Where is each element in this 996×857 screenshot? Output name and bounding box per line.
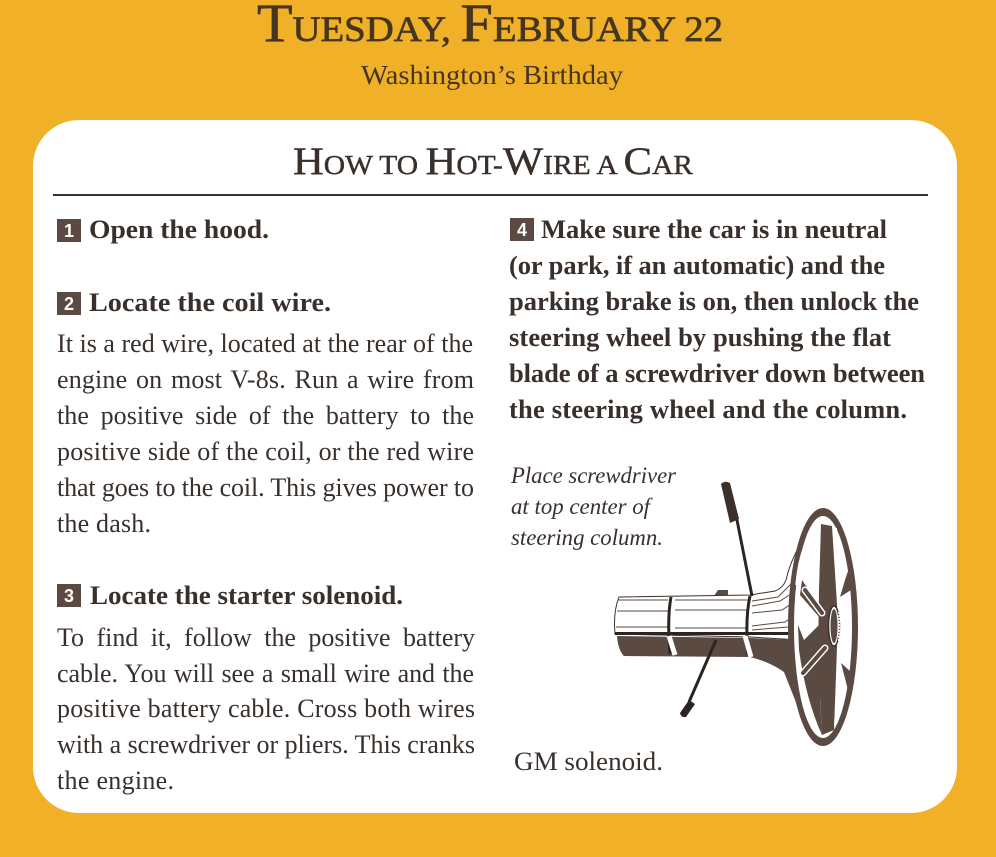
italic caption: at top center of: [511, 494, 654, 519]
step 1: Open the hood.: [89, 214, 269, 244]
step 3: positive battery cable. Cross both wires: [57, 694, 475, 723]
steering wheel: [788, 508, 858, 746]
step 2: that goes to the coil. This gives power to: [57, 473, 474, 502]
step 2: It is a red wire, located at the rear of the: [57, 329, 473, 358]
step 2: the dash.: [57, 509, 151, 538]
upper screwdriver: [736, 515, 752, 596]
step 4: the steering wheel and the column.: [509, 394, 907, 424]
wheel inner highlight: [796, 518, 821, 585]
step 2: 2: [64, 294, 74, 314]
illustration: steering column and wheel: [614, 482, 858, 746]
subtitle: Washington’s Birthday: [361, 60, 624, 90]
small latch on column: [714, 590, 728, 596]
step 4: blade of a screwdriver down between: [509, 358, 925, 388]
step 3: with a screwdriver or pliers. This cranks: [57, 730, 475, 759]
flared column white upper half: [614, 545, 815, 640]
step 4: parking brake is on, then unlock the: [509, 286, 919, 316]
italic caption: [510, 463, 677, 550]
step 4: [509, 214, 925, 424]
step 2: [57, 287, 474, 538]
italic caption: Place screwdriver: [510, 463, 677, 488]
illustration caption: GM solenoid.: [514, 747, 663, 776]
step 3: To find it, follow the positive battery: [57, 623, 475, 652]
column highlight lines: [616, 580, 802, 630]
italic caption: steering column.: [511, 525, 663, 550]
wheel hub: [828, 606, 840, 646]
step 4: Make sure the car is in neutral: [541, 214, 887, 244]
step 4: (or park, if an automatic) and the: [509, 250, 885, 280]
step 2: Locate the coil wire.: [89, 287, 331, 317]
heading rule: [53, 194, 928, 196]
wheel dark central spoke and sections: [818, 524, 838, 735]
panel: white card: [33, 120, 957, 813]
heading: HOW TO HOT-WIRE A CAR: [293, 140, 693, 183]
step 1: 1: [64, 221, 74, 241]
flared column dark lower half: [617, 631, 815, 742]
column band lines: [615, 632, 795, 635]
step 2: engine on most V-8s. Run a wire from: [57, 365, 474, 394]
step 3: cable. You will see a small wire and the: [57, 659, 474, 688]
step 3: [57, 580, 475, 795]
step 2: the positive side of the battery to the: [57, 401, 474, 430]
step 3: 3: [64, 586, 74, 606]
step 2: positive side of the coil, or the red wire: [57, 437, 474, 466]
step 3: the engine.: [57, 766, 174, 795]
wheel spokes: [805, 590, 822, 613]
step 4: steering wheel by pushing the flat: [509, 322, 891, 352]
step 4: 4: [517, 220, 527, 240]
step 3: Locate the starter solenoid.: [90, 580, 403, 610]
lower screwdriver: [689, 640, 716, 702]
